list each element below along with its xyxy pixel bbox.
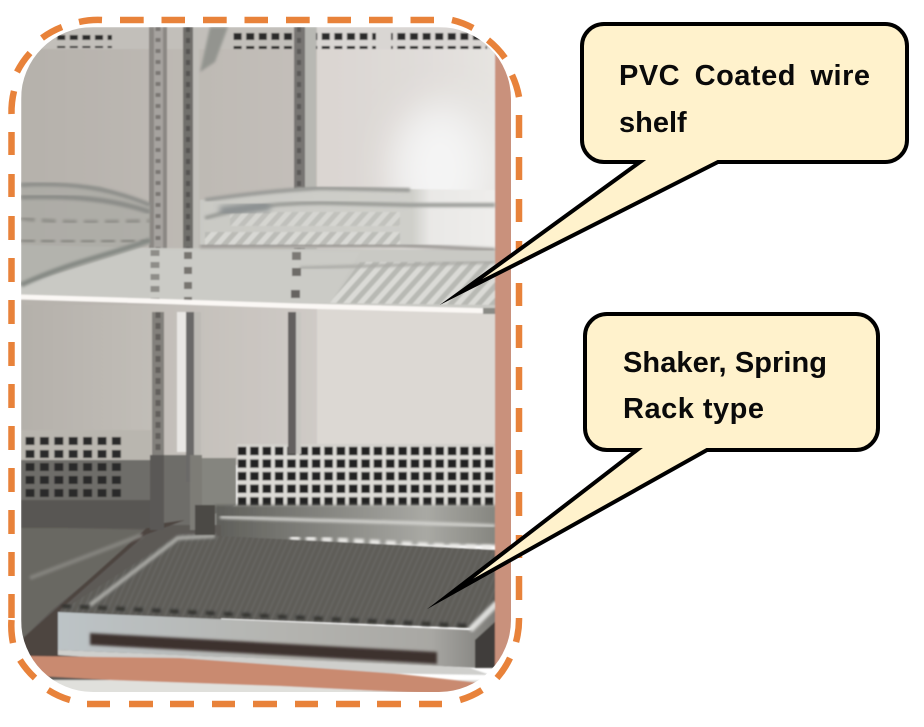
label text: shelf bbox=[619, 107, 687, 139]
callout: PVC coated wire shelf bbox=[461, 24, 907, 292]
lower back wall with perforated panels bbox=[21, 430, 497, 548]
label text: PVC Coated wire bbox=[619, 60, 870, 92]
left lower ledge bbox=[21, 500, 221, 695]
top perforation rows bbox=[56, 32, 488, 50]
callout: shaker spring rack type bbox=[450, 314, 878, 594]
uprights bbox=[149, 27, 316, 535]
back wall bbox=[21, 27, 497, 465]
dashed orange highlight border bbox=[11, 20, 519, 704]
label text: Shaker, Spring bbox=[623, 347, 827, 379]
shaker spring rack tray bbox=[58, 534, 497, 675]
label text: Rack type bbox=[623, 393, 764, 425]
PVC coated wire shelf bbox=[21, 182, 495, 314]
photo: incubator chamber interior bbox=[21, 27, 515, 696]
salmon cabinet edge and floor bbox=[21, 27, 515, 696]
